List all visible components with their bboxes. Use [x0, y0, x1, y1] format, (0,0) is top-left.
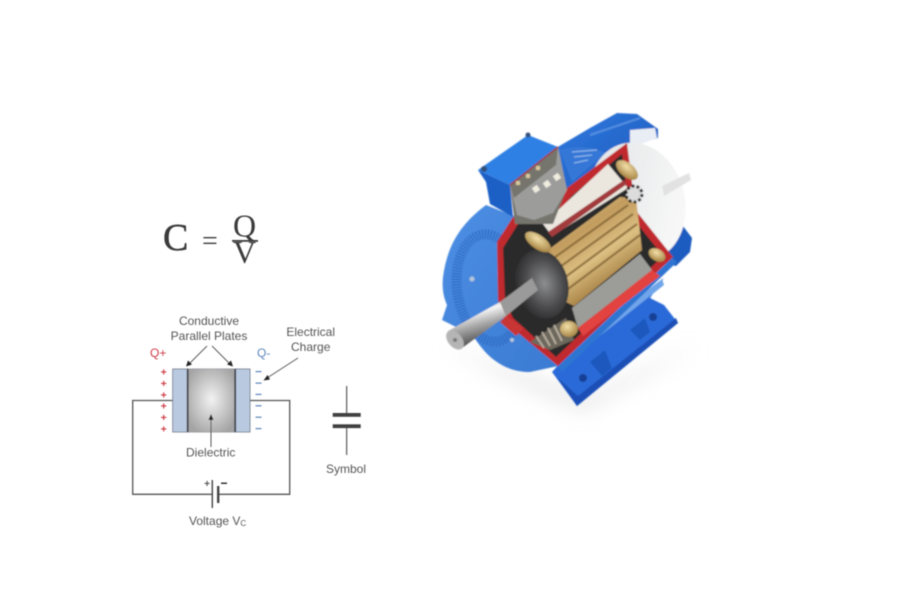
label: electrical charge — [286, 325, 335, 354]
upper stator — [543, 164, 628, 237]
label: symbol: Symbol — [326, 462, 366, 476]
positive charges: + — [161, 401, 167, 413]
label: electrical charge: Electrical — [286, 325, 335, 339]
negative charges: Q- — [257, 346, 270, 360]
red frame cutaway — [497, 143, 677, 372]
motor shadow — [440, 300, 735, 412]
upper left coil — [522, 228, 554, 256]
formula: C = Q / V: Q — [233, 208, 256, 244]
lower stator — [572, 254, 660, 336]
arrow to the dielectric — [208, 414, 214, 447]
arrows to the plates — [186, 346, 233, 366]
positive charges: + — [161, 412, 167, 424]
label: voltage: Voltage V — [189, 514, 240, 528]
fan bearing — [626, 186, 642, 202]
motor shaft — [443, 278, 538, 353]
terminal box — [478, 132, 567, 224]
lower right coil — [646, 245, 668, 265]
rear fan cover — [556, 113, 692, 266]
end shield — [442, 205, 558, 372]
battery — [204, 479, 227, 508]
bearing spring — [530, 318, 578, 350]
cooling fan — [576, 132, 698, 272]
positive charges: Q+ — [150, 346, 166, 360]
label: conductive parallel plates — [171, 314, 247, 343]
positive charges — [150, 346, 167, 436]
rotor hub — [508, 243, 576, 325]
positive charges: + — [161, 366, 167, 378]
positive charges: + — [161, 389, 167, 401]
formula: C = Q / V: V — [233, 234, 256, 270]
capacitor plates — [173, 369, 250, 432]
electric motor cutaway illustration — [440, 113, 735, 412]
label: conductive parallel plates: Parallel Plates — [171, 329, 247, 343]
positive charges: + — [161, 424, 167, 436]
arrow to the charge — [264, 358, 298, 380]
battery: + — [204, 479, 210, 490]
formula: C = Q / V: C — [163, 217, 188, 259]
capacitor circuit diagram — [133, 314, 366, 528]
label: dielectric: Dielectric — [186, 446, 235, 460]
positive charges: + — [161, 378, 167, 390]
formula: C = Q / V: = — [202, 226, 218, 257]
label: voltage: C — [240, 519, 246, 528]
capacitor symbol — [333, 386, 361, 455]
circuit wires — [133, 400, 290, 494]
formula: C = Q / V — [163, 208, 258, 270]
negative charges — [256, 346, 270, 429]
mounting foot — [552, 278, 678, 406]
rotor — [547, 197, 642, 306]
label: conductive parallel plates: Conductive — [179, 314, 239, 328]
upper right coil — [613, 156, 641, 184]
label: electrical charge: Charge — [291, 340, 331, 354]
